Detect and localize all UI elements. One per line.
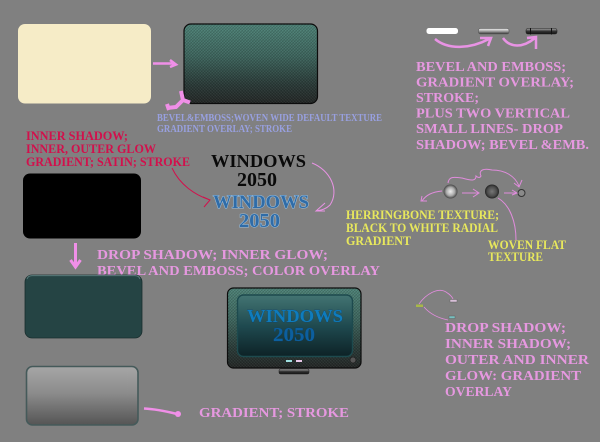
icon: light sphere [444, 184, 458, 198]
text: blue Windows 2050: 2050 [239, 210, 280, 232]
monitor title text: 2050 [273, 324, 315, 346]
text: black Windows 2050: 2050 [237, 169, 277, 191]
icon: dark sphere [485, 184, 499, 198]
text: gradient stroke: GRADIENT; STROKE [199, 406, 349, 421]
text: drop shadow inner shadow notes: GLOW: GRADIENT [445, 369, 582, 384]
icon: small sphere [518, 190, 525, 196]
text: herringbone notes: GRADIENT [346, 234, 412, 248]
caption: bevel and emboss woven [157, 113, 382, 135]
monitor screen [238, 295, 352, 356]
monitor buttons [286, 360, 302, 362]
text: drop shadow inner shadow notes [445, 321, 590, 400]
icon: gray bar [478, 28, 509, 34]
icon: pink small button [450, 300, 457, 302]
icon: dark bar with vertical lines [526, 28, 557, 34]
arrow: cream to woven panel [153, 60, 176, 67]
panel: black rectangle [23, 174, 141, 238]
text: drop shadow inner shadow notes: OUTER AND INNER [445, 353, 590, 368]
arrow: white bar to gray bar [435, 38, 491, 47]
arrow: gray bar to dark bar [503, 37, 536, 49]
monitor title text [247, 306, 343, 346]
text: herringbone notes: BLACK TO WHITE RADIAL [346, 221, 498, 235]
text: blue Windows 2050: WINDOWS [213, 193, 309, 213]
text: bevel and emboss notes: SMALL LINES- DROP [416, 122, 563, 137]
arrow: gray rectangle to label [144, 408, 177, 414]
arrow head: gray rectangle label [175, 411, 181, 417]
arrow: red curve to blue title [172, 168, 210, 207]
monitor stand [279, 369, 309, 374]
text: inner shadow notes: INNER SHADOW; [26, 129, 128, 143]
text: drop shadow inner shadow notes: OVERLAY [445, 385, 512, 400]
panel: gray gradient rectangle [26, 366, 138, 425]
arrow: black to teal [70, 243, 80, 267]
panel: cream base rectangle [18, 24, 151, 104]
text: bevel and emboss notes: BEVEL AND EMBOSS; [416, 60, 566, 75]
text: woven flat texture: TEXTURE [488, 250, 543, 264]
arrow: pink thick to caption [167, 91, 190, 110]
text: black Windows 2050 [211, 151, 306, 191]
text: bevel and emboss notes: STROKE; [416, 91, 479, 106]
text: drop shadow notes: BEVEL AND EMBOSS; COLOR OVERLAY [97, 264, 380, 279]
text: drop shadow inner shadow notes: INNER SHADOW; [445, 337, 571, 352]
arrow: pink curve to blue title [312, 163, 334, 211]
icon: cyan small button [449, 316, 455, 318]
text: drop shadow inner shadow notes: DROP SHADOW; [445, 321, 566, 336]
text: herringbone notes [346, 208, 499, 248]
icon: white bar [426, 28, 458, 34]
caption: bevel and emboss woven: GRADIENT OVERLAY; STROKE [157, 124, 292, 135]
text: bevel and emboss notes: PLUS TWO VERTICAL [416, 106, 570, 122]
text: drop shadow notes: DROP SHADOW; INNER GLOW; [97, 248, 328, 263]
panel: dark teal rectangle [25, 275, 142, 338]
monitor illustration [228, 288, 361, 374]
monitor frame [228, 288, 361, 368]
text: drop shadow notes [97, 248, 380, 279]
text: bevel and emboss notes: SHADOW; BEVEL &EMB. [416, 138, 589, 153]
text: woven flat texture: WOVEN FLAT [488, 238, 567, 252]
monitor power light [350, 357, 356, 363]
text: inner shadow notes [26, 129, 190, 169]
caption: bevel and emboss woven: BEVEL&EMBOSS;WOVEN WIDE DEFAULT TEXTURE [157, 113, 382, 124]
text: black Windows 2050: WINDOWS [211, 151, 306, 171]
monitor title text: WINDOWS [247, 306, 343, 326]
text: inner shadow notes: GRADIENT; SATIN; STROKE [26, 155, 190, 169]
text: herringbone notes: HERRINGBONE TEXTURE; [346, 208, 499, 222]
text: woven flat texture [488, 238, 567, 264]
arrows: thin curves from green button [419, 290, 453, 320]
text: bevel and emboss notes: GRADIENT OVERLAY; [416, 76, 574, 90]
text: inner shadow notes: INNER, OUTER GLOW [26, 142, 156, 156]
arrows: thin pink sphere connectors [421, 169, 522, 240]
text: bevel and emboss notes [416, 60, 589, 153]
icon: green small button [416, 304, 423, 307]
text: blue Windows 2050 [213, 193, 309, 232]
panel: woven teal rectangle [184, 24, 318, 104]
